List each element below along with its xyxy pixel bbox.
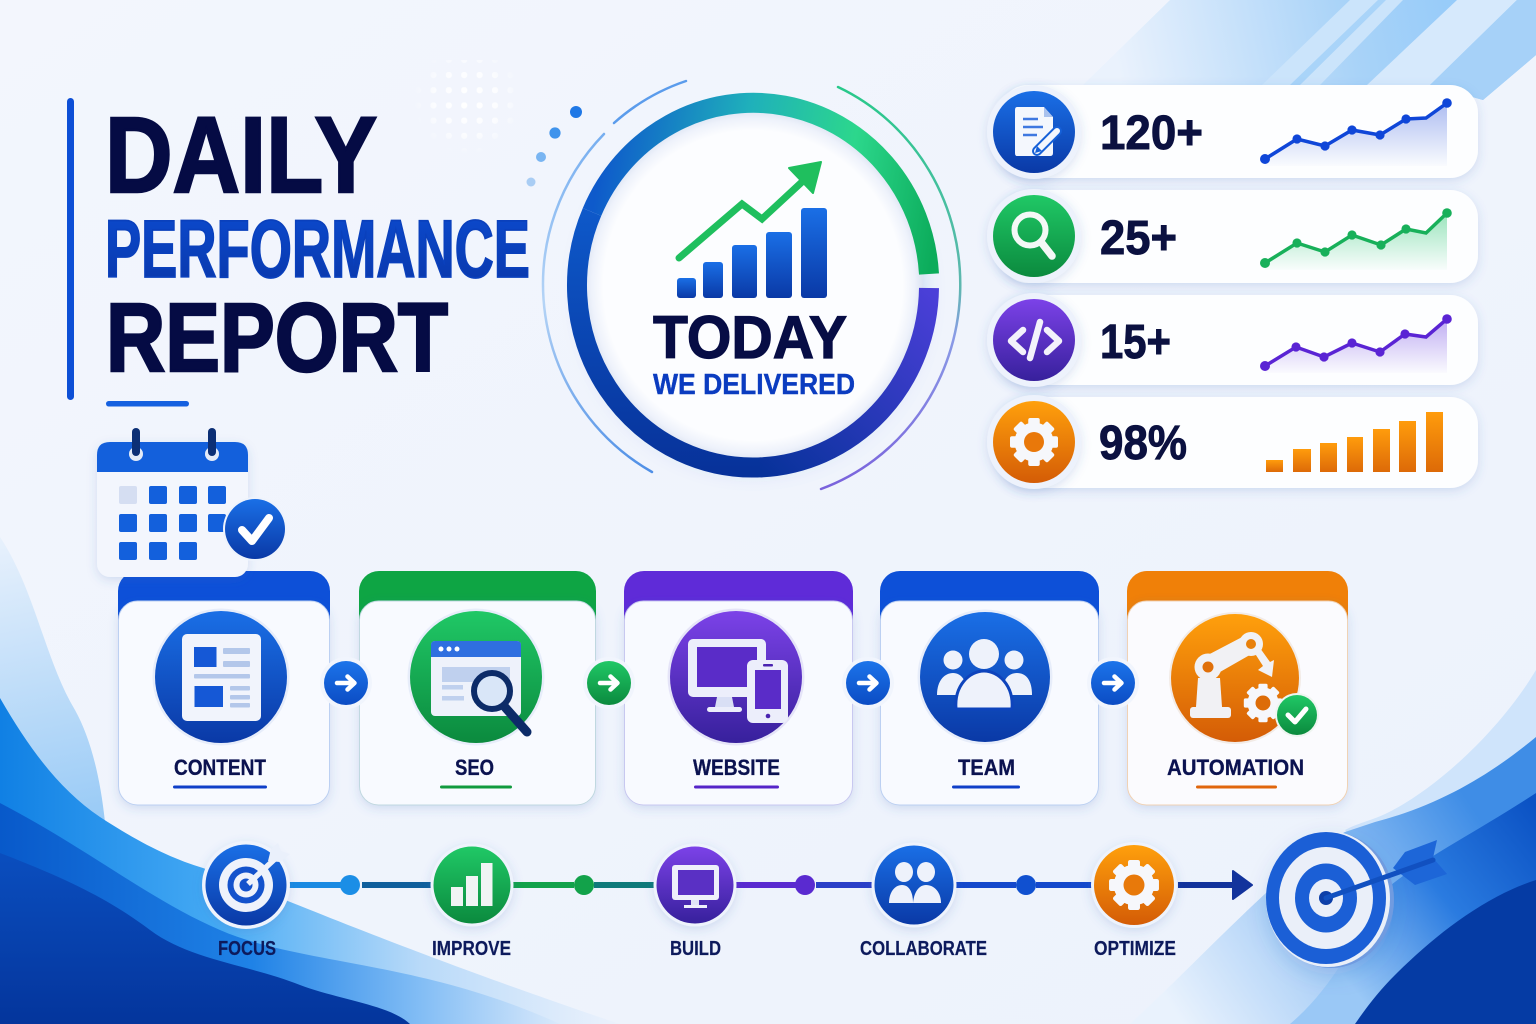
icon: search window (408, 608, 544, 746)
label: CONTENT (174, 755, 266, 780)
value: 120+ (1100, 107, 1203, 160)
icon: robot arm (1169, 612, 1319, 744)
value: 98% (1099, 417, 1187, 470)
label: SEO (455, 755, 494, 780)
label: WEBSITE (693, 755, 780, 780)
icon: gear (987, 395, 1081, 489)
icon: devices (668, 608, 804, 746)
arrow: team to automation (1087, 657, 1139, 709)
title line: performance: PERFORMANCE (105, 204, 530, 295)
sparkline (1260, 314, 1452, 373)
label: IMPROVE (432, 938, 511, 960)
dial disc (583, 110, 923, 462)
icon: team (918, 610, 1052, 744)
panel: seo (359, 571, 596, 805)
arrow: seo to website (583, 657, 635, 709)
stat panel: 120+ (987, 85, 1478, 179)
label: TEAM (958, 755, 1015, 780)
decorative blue dots (526, 106, 582, 186)
step: collaborate (860, 842, 987, 960)
step: improve (430, 844, 514, 960)
label: FOCUS (218, 938, 276, 960)
dial subheading: we delivered: WE DELIVERED (653, 369, 855, 401)
timeline (288, 871, 1252, 899)
stat panel: 98% (987, 395, 1478, 489)
title line: daily: DAILY (105, 94, 377, 215)
panel: automation (1127, 571, 1348, 805)
step: build (654, 844, 736, 960)
label: AUTOMATION (1167, 755, 1304, 780)
outer thin arcs (543, 81, 960, 489)
ring (577, 103, 929, 468)
icon: target with arrow (1266, 831, 1447, 968)
sparkline (1260, 98, 1452, 166)
title line: report: REPORT (106, 283, 448, 392)
arrow: website to team (842, 657, 894, 709)
step: focus (202, 841, 290, 960)
central dial (543, 81, 960, 489)
icon: check badge (1275, 693, 1319, 737)
icon: check badge (223, 497, 287, 561)
panel: team (880, 571, 1099, 805)
value: 15+ (1100, 316, 1171, 369)
panel: content (118, 571, 330, 805)
icon: document (987, 85, 1081, 179)
sparkline (1260, 208, 1452, 270)
label: BUILD (670, 938, 721, 960)
growth chart icon (677, 162, 827, 298)
bar chart (1266, 412, 1443, 472)
label: COLLABORATE (860, 938, 987, 960)
panel: website (624, 571, 853, 805)
label: OPTIMIZE (1094, 938, 1176, 960)
stat panel: 15+ (987, 293, 1478, 387)
icon: magnifier (987, 189, 1081, 283)
timeline connectors (288, 871, 1252, 899)
step: optimize (1091, 842, 1177, 960)
title block (67, 94, 530, 406)
dial heading: today: TODAY (653, 304, 847, 371)
stat panel: 25+ (987, 189, 1478, 283)
icon: content page (152, 608, 290, 746)
icon: code (987, 293, 1081, 387)
arrow: content to seo (320, 657, 372, 709)
value: 25+ (1100, 212, 1177, 265)
icon: calendar with check (97, 428, 287, 577)
